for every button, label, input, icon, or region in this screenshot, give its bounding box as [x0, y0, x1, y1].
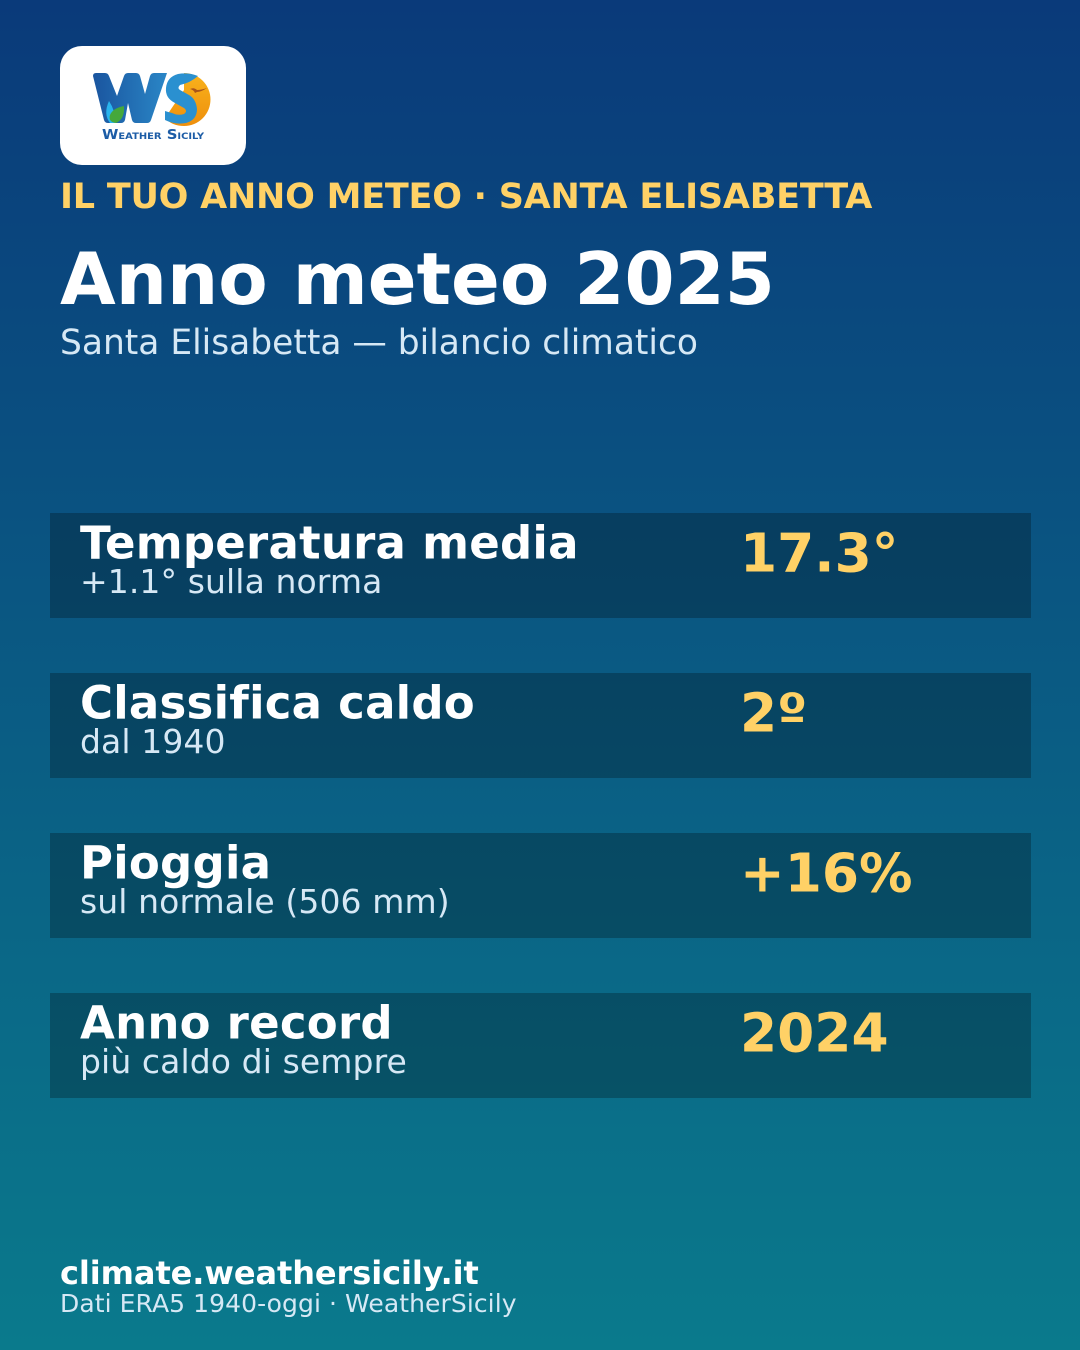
icon: letter W: [93, 73, 167, 123]
footer url: climate.weathersicily.it: [60, 1254, 479, 1292]
footer source: Dati ERA5 1940-oggi · WeatherSicily: [60, 1289, 517, 1318]
sublabel: più caldo di sempre: [80, 1042, 407, 1081]
icon: leaf: [110, 106, 124, 123]
label: Pioggia: [80, 836, 271, 890]
label: Anno record: [80, 996, 393, 1050]
panel: temperatura media: [50, 513, 1031, 618]
label: Temperatura media: [80, 516, 579, 570]
panel: pioggia: [50, 833, 1031, 938]
icon: water drop: [106, 101, 116, 123]
value: 2º: [740, 682, 807, 744]
sublabel: +1.1° sulla norma: [80, 562, 382, 601]
icon: letter S: [165, 73, 198, 124]
subtitle: Santa Elisabetta — bilancio climatico: [60, 323, 698, 363]
panel: anno record: [50, 993, 1031, 1098]
panel: classifica caldo: [50, 673, 1031, 778]
value: +16%: [740, 842, 913, 904]
sublabel: dal 1940: [80, 722, 226, 761]
label: Classifica caldo: [80, 676, 475, 730]
icon: sun: [165, 73, 210, 126]
sublabel: sul normale (506 mm): [80, 882, 450, 921]
title: Anno meteo 2025: [60, 237, 775, 321]
value: 2024: [740, 1002, 889, 1064]
logo: Weather Sicily: [60, 46, 246, 165]
value: 17.3°: [740, 522, 898, 584]
kicker: IL TUO ANNO METEO · SANTA ELISABETTA: [60, 177, 872, 217]
icon: bird: [190, 88, 207, 93]
logo wordmark: Weather Sicily: [102, 127, 205, 143]
